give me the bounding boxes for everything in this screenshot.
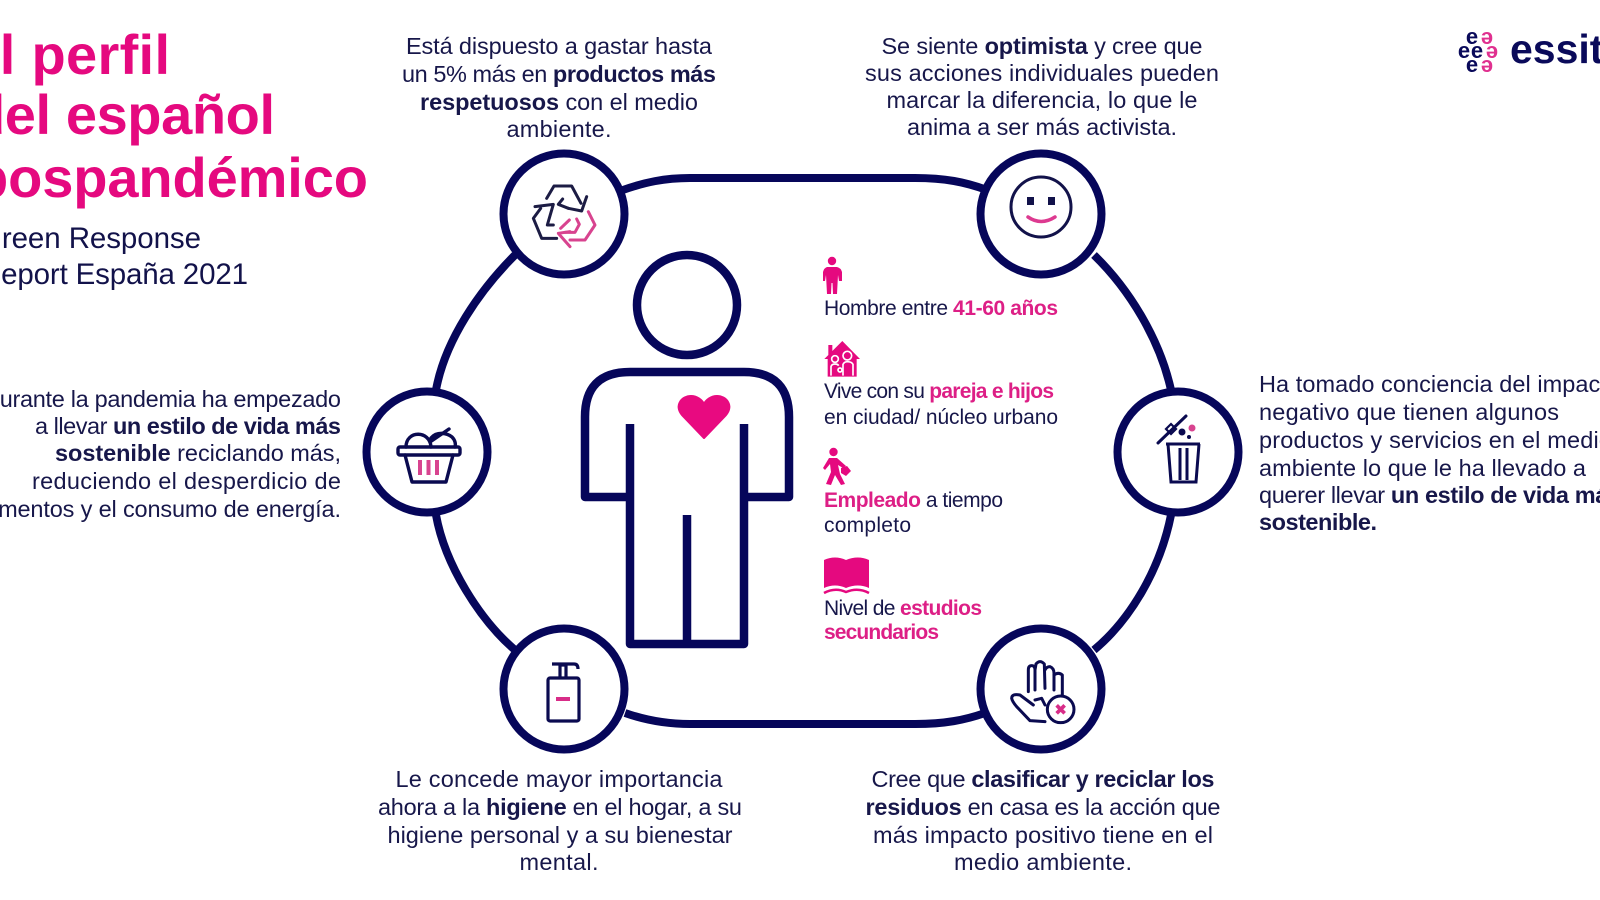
text block: left: a llevar un estilo de vida más xyxy=(35,413,341,439)
icon: smiley xyxy=(980,154,1102,274)
text block: bottom left: ahora a la higiene en el hogar, a su xyxy=(378,794,742,820)
text block: right: negativo que tienen algunos xyxy=(1259,399,1559,425)
text block: top right: marcar la diferencia, lo que le xyxy=(886,87,1198,113)
icon: house with family xyxy=(824,341,860,377)
text block: left xyxy=(0,386,341,522)
info: education: secundarios xyxy=(824,621,939,644)
text block: top right: anima a ser más activista. xyxy=(907,114,1177,140)
text block: top right: Se siente optimista y cree que xyxy=(882,33,1202,59)
info: household: Vive con su pareja e hijos xyxy=(824,380,1054,403)
logo: essity: e xyxy=(1466,52,1478,77)
central person figure xyxy=(585,255,789,644)
text block: right xyxy=(1259,371,1600,535)
icon: soap dispenser xyxy=(504,628,624,750)
heart xyxy=(679,396,729,438)
text block: right: ambiente lo que le ha llevado a xyxy=(1259,455,1587,481)
text block: top left: un 5% más en productos más xyxy=(402,61,716,87)
text block: bottom left xyxy=(378,766,742,875)
icon: open book xyxy=(824,558,869,593)
text block: top left: Está dispuesto a gastar hasta xyxy=(406,33,713,59)
info: employment xyxy=(824,489,1003,537)
text block: left: reduciendo el desperdicio de xyxy=(32,468,341,494)
icon: recycle xyxy=(504,154,624,274)
subtitle xyxy=(0,222,248,291)
text block: bottom right: medio ambiente. xyxy=(954,849,1132,875)
icon: walking employee xyxy=(823,448,851,485)
ring connecting the icons xyxy=(436,178,1171,724)
logo: essity: e xyxy=(1481,27,1493,52)
body outline xyxy=(585,372,789,644)
icon: man xyxy=(823,257,842,294)
info: employment: completo xyxy=(824,514,911,537)
text block: left: sostenible reciclando más, xyxy=(55,440,341,466)
text block: bottom right: residuos en casa es la acción que xyxy=(866,794,1220,820)
logo: essity: e xyxy=(1486,41,1498,66)
icon: trash bin xyxy=(1118,392,1238,512)
icon: basket xyxy=(366,392,488,512)
info: education xyxy=(824,597,982,644)
text block: top right xyxy=(865,33,1219,140)
text block: bottom left: mental. xyxy=(520,849,598,875)
info: employment: Empleado a tiempo xyxy=(824,489,1003,512)
logo: essity: e xyxy=(1481,55,1493,80)
text block: bottom right xyxy=(866,766,1220,875)
logo: essity xyxy=(1458,24,1600,80)
text block: top left xyxy=(402,33,716,142)
logo: essity: e xyxy=(1458,38,1470,63)
text block: bottom right: más impacto positivo tiene en el xyxy=(873,822,1213,848)
head xyxy=(637,255,737,355)
text block: right: sostenible. xyxy=(1259,509,1377,535)
icon: hand with cross xyxy=(980,628,1102,750)
text block: bottom right: Cree que clasificar y reciclar los xyxy=(872,766,1214,792)
text block: top left: respetuosos con el medio xyxy=(420,89,698,115)
logo: essity: e xyxy=(1471,38,1483,63)
text block: top right: sus acciones individuales pueden xyxy=(865,60,1219,86)
text block: bottom left: Le concede mayor importancia xyxy=(396,766,723,792)
logo: essity: e xyxy=(1466,24,1478,49)
title xyxy=(0,23,368,209)
text block: bottom left: higiene personal y a su bienestar xyxy=(388,822,733,848)
info: household xyxy=(824,380,1058,429)
info: age: Hombre entre 41-60 años xyxy=(824,297,1058,320)
info: education: Nivel de estudios xyxy=(824,597,982,620)
text block: top left: ambiente. xyxy=(506,116,612,142)
info: household: en ciudad/ núcleo urbano xyxy=(824,406,1058,429)
